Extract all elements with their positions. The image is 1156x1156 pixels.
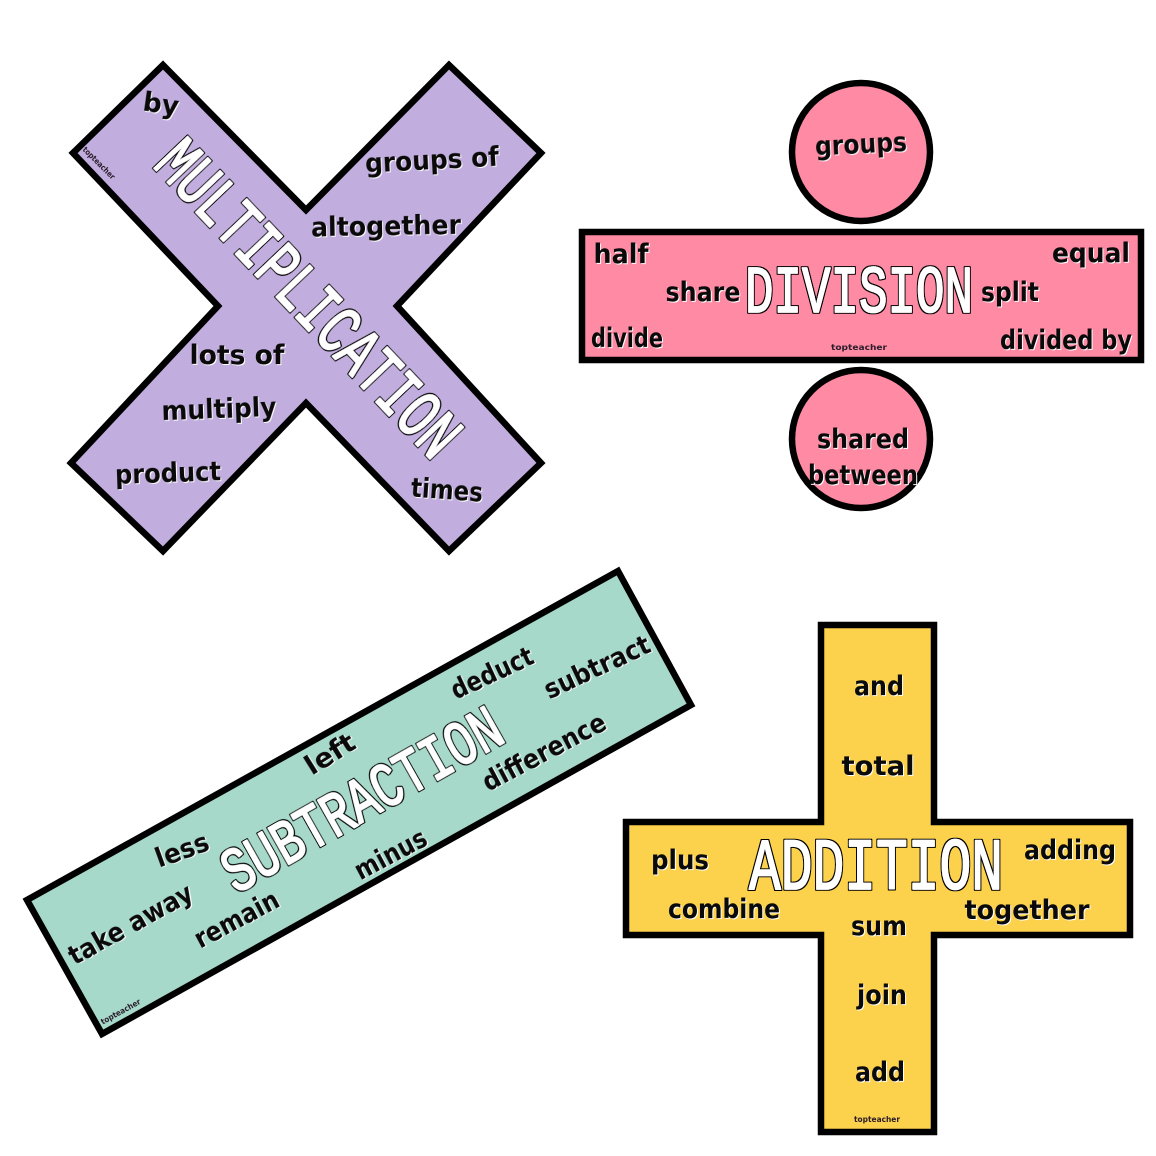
- heading: subtraction: SUBTRACTION: [210, 695, 517, 911]
- panel: subtraction: [27, 571, 691, 1034]
- logo: topteacher: [99, 997, 142, 1026]
- division bar: [582, 232, 1141, 360]
- division bottom dot: [792, 370, 930, 508]
- word: remain: remain: [189, 884, 285, 955]
- heading: division: DIVISION: [745, 257, 973, 333]
- word: divided by: divided by: [1000, 325, 1132, 356]
- logo: topteacher: [831, 343, 887, 352]
- word: deduct: deduct: [446, 641, 539, 706]
- word: together: together: [964, 895, 1090, 926]
- word: divide: divide: [591, 323, 663, 354]
- word: half: half: [594, 239, 649, 270]
- word: shared between: shared: [817, 424, 909, 455]
- word: less: less: [151, 826, 213, 874]
- division top dot: [792, 83, 930, 221]
- multiplication cross shape: [71, 65, 541, 551]
- word: combine: combine: [668, 894, 780, 925]
- word: minus: minus: [349, 823, 432, 887]
- word: subtract: subtract: [539, 629, 655, 706]
- word: product: product: [114, 456, 222, 491]
- panel: division: [582, 83, 1141, 508]
- word: sum: sum: [851, 911, 907, 942]
- word: plus: plus: [651, 845, 709, 876]
- word: shared between: [808, 424, 918, 491]
- subtraction bar: [27, 571, 691, 1034]
- word: equal: equal: [1052, 238, 1130, 269]
- word: multiply: multiply: [161, 392, 277, 427]
- word: times: times: [410, 473, 484, 508]
- word: add: add: [855, 1057, 905, 1088]
- word: altogether: altogether: [311, 210, 462, 243]
- word: by: by: [141, 87, 181, 122]
- word: and: and: [854, 671, 904, 702]
- word: groups: groups: [814, 127, 908, 162]
- word: split: split: [981, 277, 1039, 308]
- heading: multiplication: MULTIPLICATION: [136, 127, 474, 477]
- word: groups of: groups of: [364, 142, 500, 179]
- word: take away: take away: [63, 877, 199, 972]
- panel: multiplication: [71, 65, 541, 551]
- word: join: join: [856, 980, 907, 1011]
- word: total: total: [842, 751, 914, 782]
- logo: topteacher: [81, 145, 117, 181]
- word: difference: difference: [477, 707, 612, 798]
- logo: topteacher: [854, 1115, 900, 1124]
- word: share: share: [666, 277, 740, 308]
- word: left: left: [299, 727, 361, 782]
- addition plus shape: [626, 625, 1130, 1132]
- heading: addition: ADDITION: [749, 828, 1003, 911]
- word: shared between: between: [808, 460, 918, 491]
- word: adding: adding: [1024, 835, 1116, 866]
- word: lots of: lots of: [190, 340, 285, 371]
- panel: addition: [626, 625, 1130, 1132]
